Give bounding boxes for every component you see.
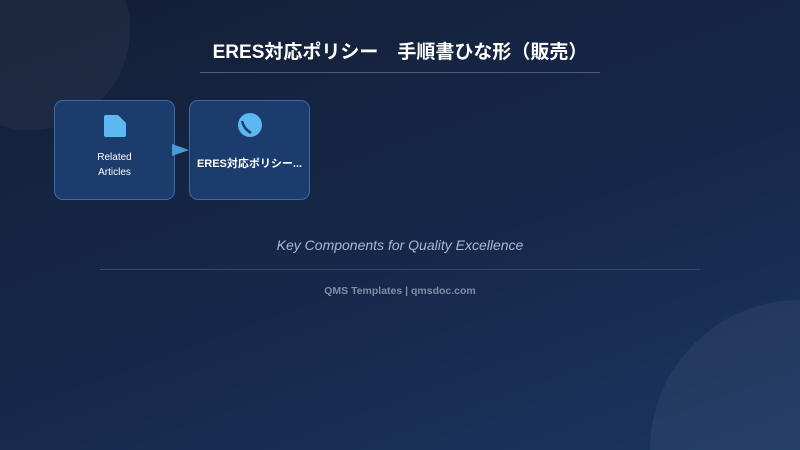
icon: document [104, 115, 126, 137]
card: ERES: ERES対応ポリシー... [197, 158, 302, 170]
footer: QMS Templates | qmsdoc.com [324, 285, 476, 297]
icon: circle [238, 113, 262, 137]
card: related articles: Articles [98, 167, 131, 178]
card: related articles [54, 100, 175, 200]
card: related articles: Related [97, 152, 132, 163]
subtitle: Key Components for Quality Excellence [277, 237, 523, 253]
card: ERES [189, 100, 310, 200]
title: ERES対応ポリシー 手順書ひな形（販売） [213, 42, 587, 63]
arrow [172, 144, 189, 156]
